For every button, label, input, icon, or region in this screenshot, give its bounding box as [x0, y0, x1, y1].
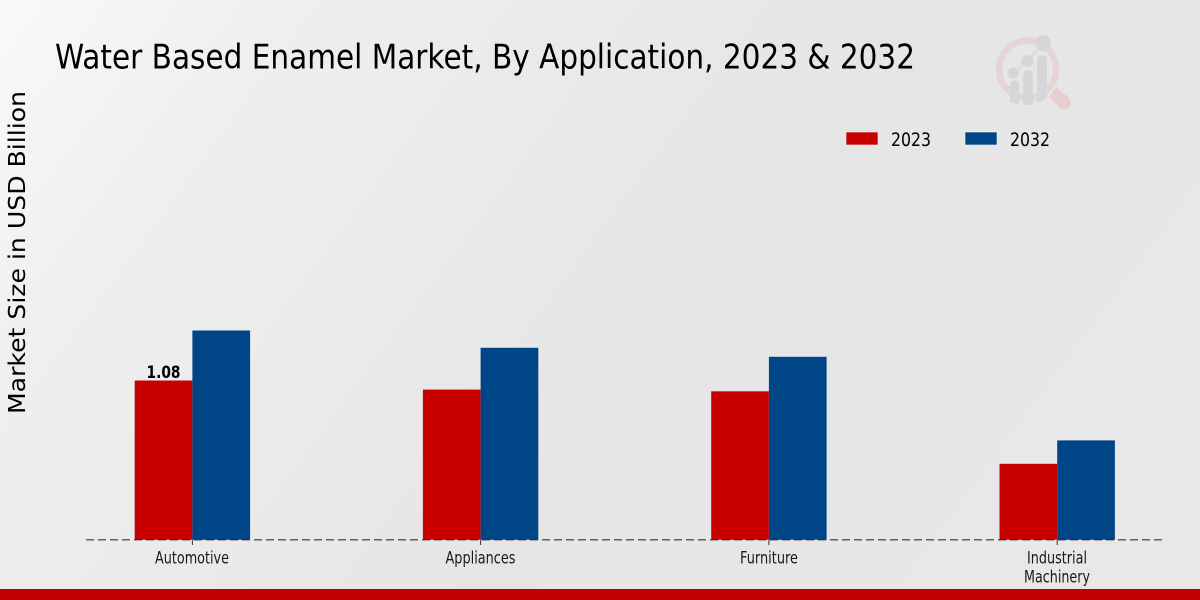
category: Industrial Machinery: Machinery: [1024, 568, 1090, 588]
category: Automotive: Automotive: [155, 548, 229, 568]
legend: [846, 129, 1050, 151]
category: Industrial Machinery: Industrial: [1027, 548, 1087, 568]
legend: 2023: 2023: [891, 129, 931, 151]
footer bar: [0, 589, 1200, 600]
legend: 2023: [846, 129, 931, 151]
category: Furniture: [711, 357, 827, 568]
category: Automotive: 1.08: [146, 363, 180, 383]
legend: 2032: [965, 129, 1050, 151]
category: Industrial Machinery: [1000, 440, 1115, 588]
category: Furniture: Furniture: [740, 548, 798, 568]
axis baseline and ticks: [86, 540, 1164, 545]
legend: 2032: 2032: [1010, 129, 1050, 151]
bar chart: [86, 330, 1164, 588]
category: Automotive: [135, 330, 250, 568]
icon: logo watermark: [999, 35, 1071, 109]
title: Water Based Enamel Market, By Application, 2023 & 2032: [55, 38, 915, 76]
category: Appliances: Appliances: [446, 548, 516, 568]
category: Appliances: [423, 348, 538, 568]
y-axis label: Market Size in USD Billion: [3, 91, 31, 414]
